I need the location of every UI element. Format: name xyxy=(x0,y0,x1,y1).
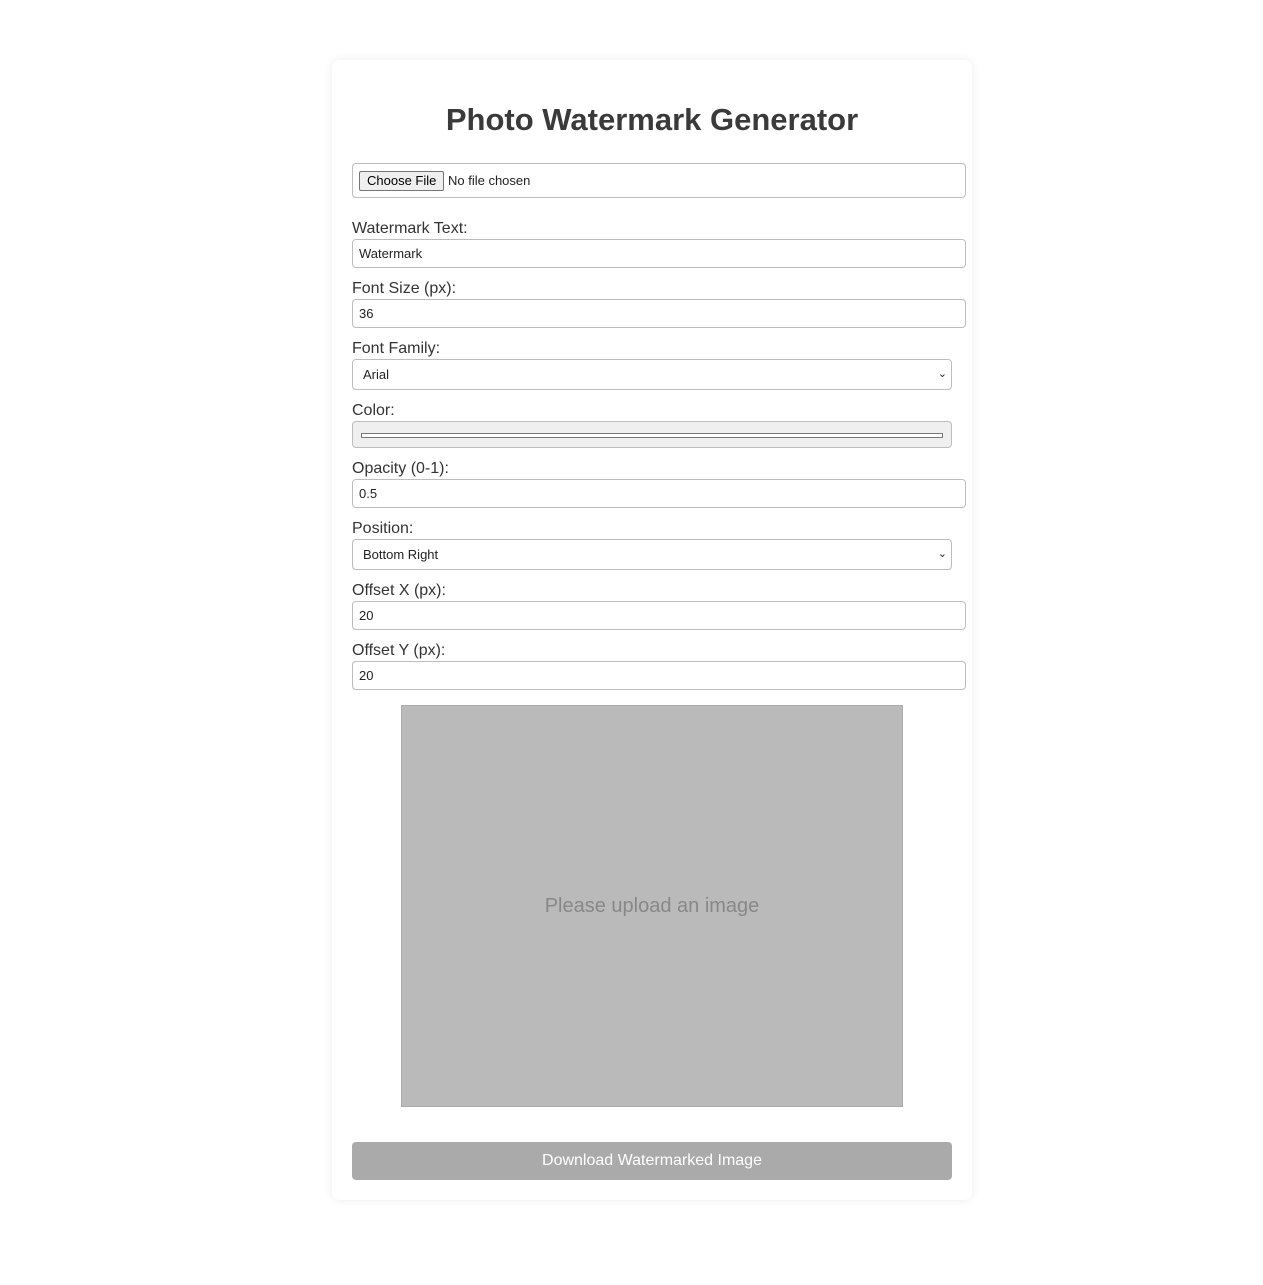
label: font family: Font Family: xyxy=(352,340,440,357)
input: offset y xyxy=(352,661,966,690)
label: offset x: Offset X (px): xyxy=(352,582,446,599)
select: font family xyxy=(352,359,952,390)
canvas preview xyxy=(401,705,903,1107)
label: font size: Font Size (px): xyxy=(352,280,456,297)
select: position: ⌄ xyxy=(938,548,947,560)
input: font size xyxy=(352,299,966,328)
input: watermark text: Watermark xyxy=(359,246,422,261)
file input xyxy=(352,163,966,198)
select: position xyxy=(352,539,952,570)
label: offset y: Offset Y (px): xyxy=(352,642,445,659)
label: watermark text: Watermark Text: xyxy=(352,220,468,237)
download button xyxy=(352,1142,952,1180)
download button: Download Watermarked Image xyxy=(542,1152,762,1169)
input: offset x: 20 xyxy=(359,608,373,623)
file input: Choose File xyxy=(367,173,436,188)
file input: No file chosen xyxy=(448,173,530,188)
input: color xyxy=(352,421,952,448)
select: font family: Arial xyxy=(363,367,389,382)
input: opacity xyxy=(352,479,966,508)
input: watermark text xyxy=(352,239,966,268)
panel: form card xyxy=(332,60,972,1200)
input: font size: 36 xyxy=(359,306,373,321)
label: color: Color: xyxy=(352,402,395,419)
label: opacity: Opacity (0-1): xyxy=(352,460,449,477)
input: offset y: 20 xyxy=(359,668,373,683)
select: position: Bottom Right xyxy=(363,547,438,562)
input: offset x xyxy=(352,601,966,630)
label: position: Position: xyxy=(352,520,413,537)
select: font family: ⌄ xyxy=(938,368,947,380)
input: opacity: 0.5 xyxy=(359,486,377,501)
title: Photo Watermark Generator xyxy=(446,102,858,137)
canvas preview: Please upload an image xyxy=(545,895,759,917)
